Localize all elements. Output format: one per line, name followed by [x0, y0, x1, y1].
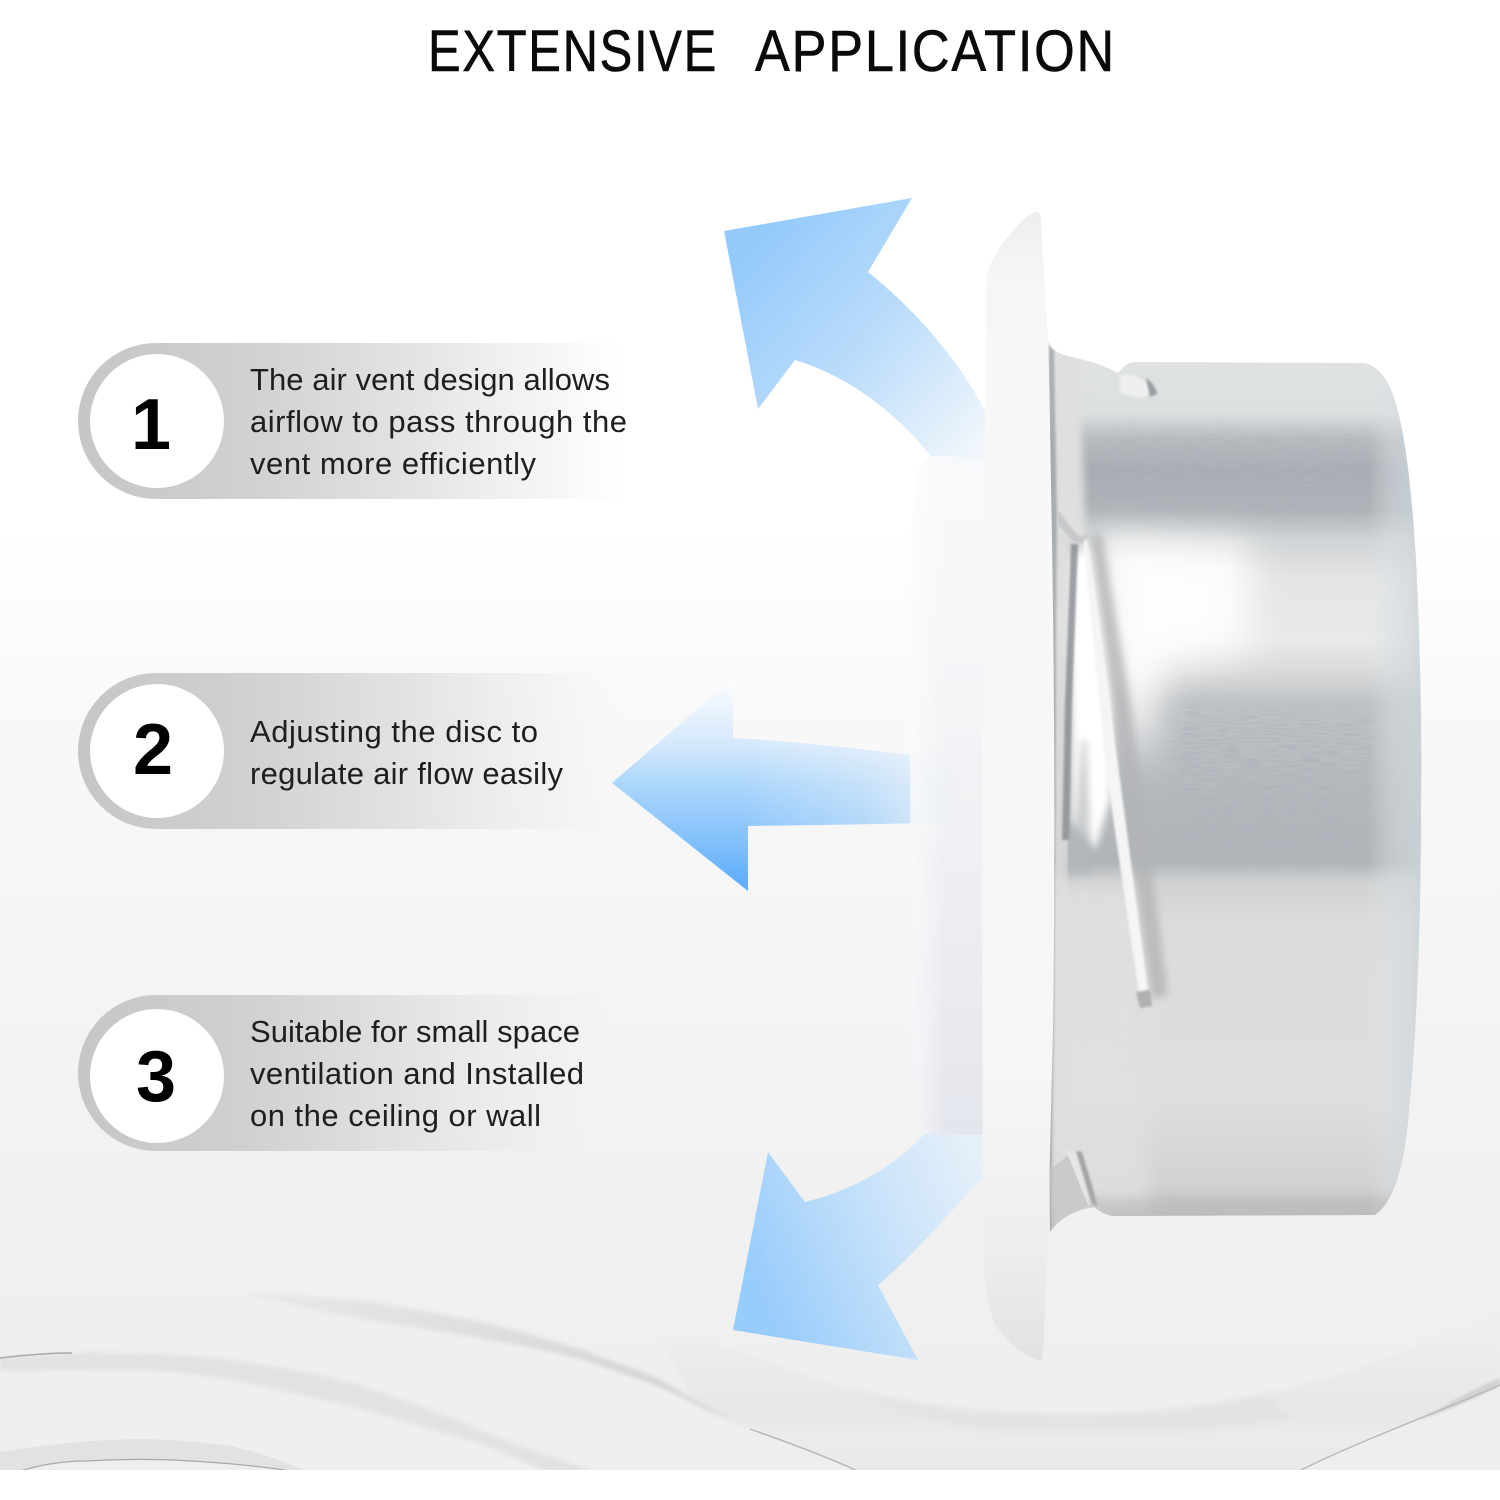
feature 1 text [250, 362, 627, 481]
arrow: airflow left [612, 698, 910, 891]
feature 3 text: ventilation and Installed [250, 1056, 584, 1091]
crease grey band [1090, 534, 1168, 1000]
number circle 2 [90, 684, 224, 818]
pill background 2 [78, 673, 640, 829]
vent disc [910, 456, 990, 1135]
feature 1 text: airflow to pass through the [250, 404, 627, 439]
dark textured stripe [1062, 544, 1078, 840]
pill background 1 [78, 343, 640, 499]
title [428, 19, 1116, 84]
number circle 2: 2 [133, 710, 173, 790]
panel: feature 2 [78, 673, 640, 829]
feature 3 text: Suitable for small space [250, 1014, 580, 1049]
kink at crease top [1058, 512, 1086, 544]
bright sheen right of crease [1095, 535, 1250, 770]
feature 1 text: vent more efficiently [250, 446, 536, 481]
pill background 3 [78, 995, 640, 1151]
number circle 1 [90, 354, 224, 488]
left vertical dark seam [1047, 345, 1057, 1230]
decorative wave floor [0, 1291, 1500, 1473]
title: EXTENSIVE [428, 19, 718, 84]
title: APPLICATION [755, 19, 1116, 84]
feature 2 text: regulate air flow easily [250, 756, 564, 791]
panel: feature 1 [78, 343, 640, 499]
left shoulder [1053, 418, 1088, 539]
feature 1 text: The air vent design allows [250, 362, 610, 397]
arrow: airflow up-left [724, 198, 990, 470]
feature 2 text [250, 714, 564, 791]
lower left body [1070, 890, 1148, 1210]
panel: feature 3 [78, 995, 640, 1151]
brushed texture [1170, 710, 1366, 787]
number circle 3 [90, 1009, 224, 1143]
number circle 3: 3 [136, 1037, 176, 1117]
feature 3 text [250, 1014, 584, 1133]
bright sheen left of crease [1072, 545, 1115, 850]
feature 2 text: Adjusting the disc to [250, 714, 538, 749]
upper dent [1120, 375, 1152, 398]
number circle 1: 1 [131, 385, 171, 465]
feature 3 text: on the ceiling or wall [250, 1098, 541, 1133]
bottom shadow [1089, 1198, 1387, 1216]
arrow: airflow down-left [733, 1134, 990, 1360]
metal duct collar [1047, 340, 1428, 1232]
secondary wedge shadow [1066, 740, 1092, 875]
crease white ridge [1083, 540, 1148, 994]
right rim tint [1376, 424, 1421, 1200]
vent flange plate [982, 212, 1054, 1361]
lower dent [1068, 1151, 1090, 1204]
crease tip [1136, 990, 1152, 1008]
